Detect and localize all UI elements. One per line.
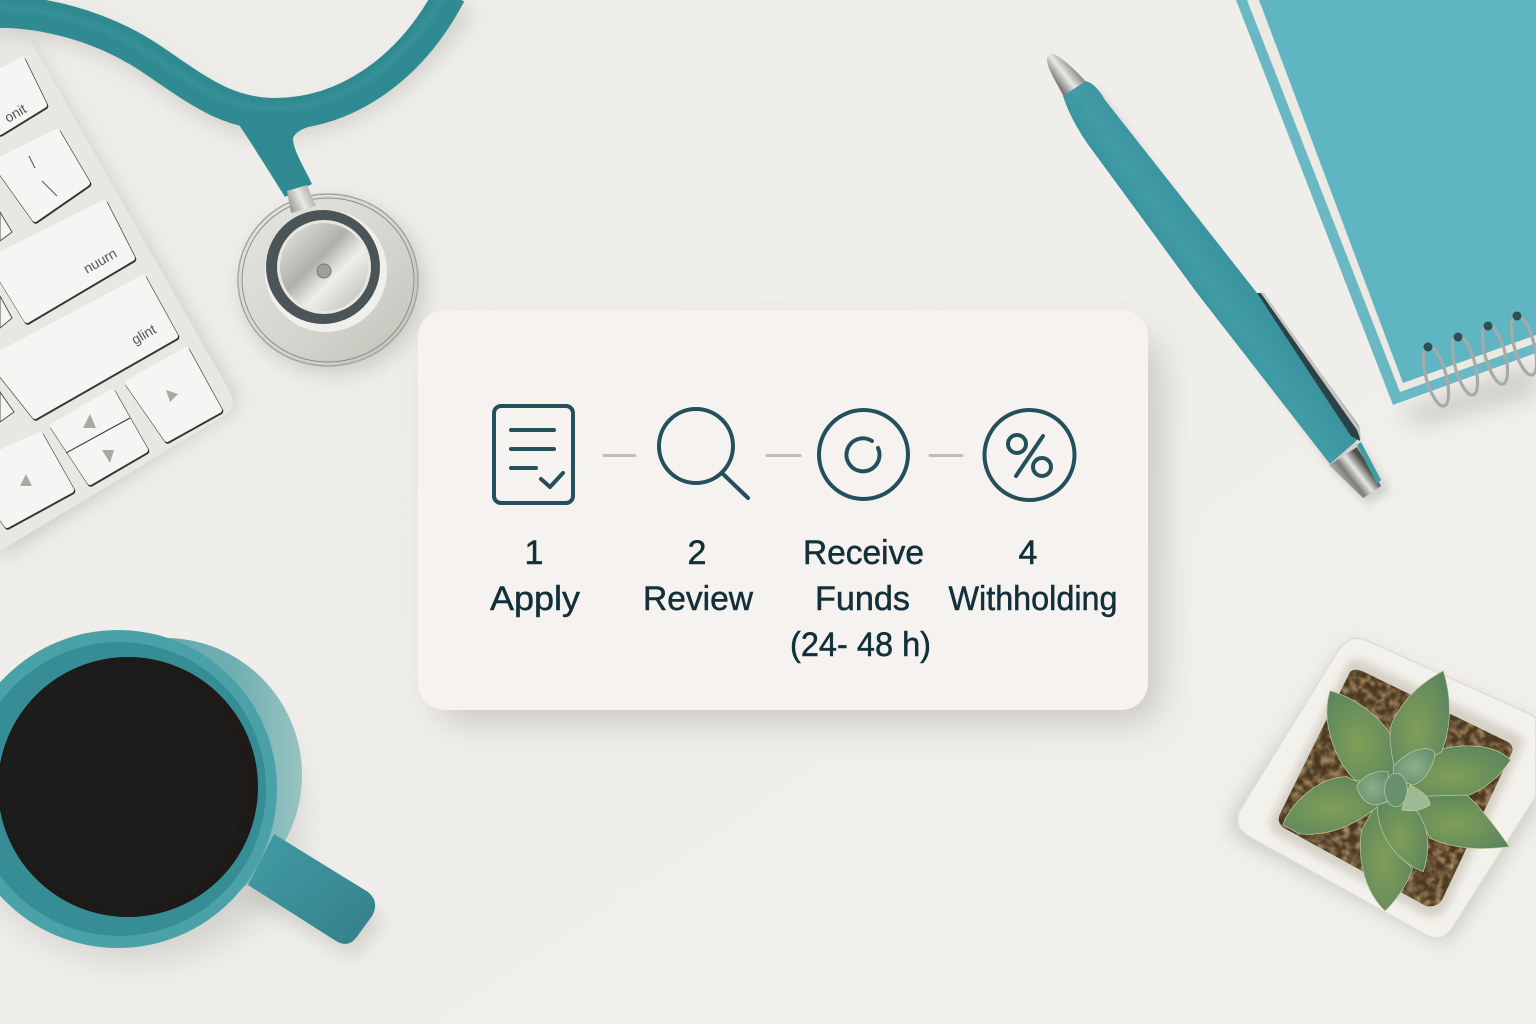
coffee <box>0 657 258 917</box>
mug body <box>28 638 302 912</box>
soil <box>1279 670 1512 906</box>
key: partial edge keys <box>0 296 14 422</box>
step 3 label <box>790 534 931 664</box>
step 4 label: Withholding <box>948 580 1118 618</box>
pen clip <box>1257 292 1361 441</box>
potted succulent <box>1232 638 1536 944</box>
key: partial left small <box>0 212 12 241</box>
key: glint <box>0 278 176 417</box>
step 1 label: 1 <box>525 534 543 572</box>
coffee mug <box>0 630 385 960</box>
key: nuurn <box>0 203 133 321</box>
arrow: connector 1 <box>604 454 635 457</box>
chest piece <box>238 185 418 366</box>
spiral rings <box>1418 312 1536 409</box>
icon: percent circle <box>984 410 1074 500</box>
step 1 label <box>490 534 580 618</box>
key: glint: glint <box>128 321 159 348</box>
key: nuurn: nuurn <box>80 245 120 277</box>
pen tip <box>1047 54 1087 97</box>
succulent leaves <box>1283 671 1511 911</box>
arrow: connector 2 <box>767 454 800 457</box>
tubing <box>0 0 450 197</box>
icon: coin circle <box>819 410 908 499</box>
mug rim <box>0 630 277 948</box>
icon: magnifying glass <box>659 409 748 498</box>
pen chrome end <box>1329 447 1381 498</box>
icon: document with check <box>494 406 573 503</box>
front cover <box>1259 0 1536 383</box>
key: partial left arrow <box>0 435 72 526</box>
step 3 label: (24- 48 h) <box>790 626 931 664</box>
process card <box>418 310 1160 722</box>
step 4 label <box>948 534 1118 618</box>
step 3 label: Receive <box>803 534 924 572</box>
pen barrel <box>1063 81 1359 464</box>
keyboard <box>0 30 240 558</box>
key: onit <box>0 60 45 133</box>
step 1 label: Apply <box>490 580 580 618</box>
paper edge <box>1247 0 1536 392</box>
key: onit: onit <box>2 100 29 126</box>
mug handle <box>248 834 375 944</box>
step 4 label: 4 <box>1019 534 1037 572</box>
step 2 label: 2 <box>688 534 706 572</box>
pot <box>1237 638 1536 938</box>
arrow: connector 3 <box>930 454 962 457</box>
back cover <box>1236 0 1536 405</box>
pen <box>1047 54 1390 505</box>
key: right arrow <box>128 350 220 440</box>
key: slash marks <box>0 132 88 220</box>
stethoscope <box>0 0 462 374</box>
step 2 label <box>643 534 753 618</box>
notebook <box>1236 0 1536 426</box>
step 2 label: Review <box>643 580 753 618</box>
step 3 label: Funds <box>815 580 910 618</box>
key: up and down arrows <box>53 392 146 483</box>
